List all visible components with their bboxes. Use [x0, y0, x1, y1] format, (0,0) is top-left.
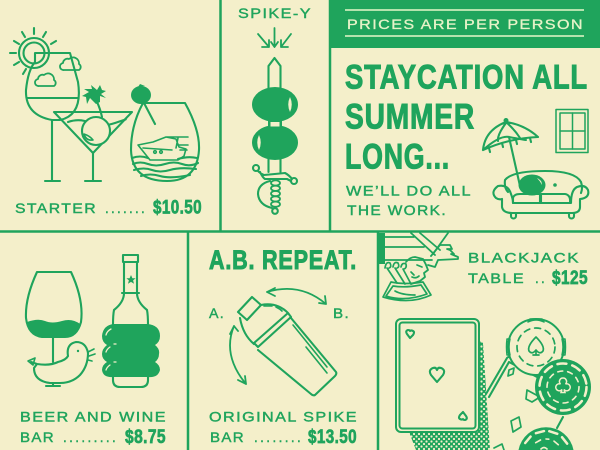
icon: cocktail umbrella — [483, 122, 538, 186]
icon: dotted card shadow — [409, 340, 490, 450]
price: blackjack table: .. — [535, 271, 546, 286]
icon: dark club chip — [535, 359, 591, 415]
price: original spike bar: $13.50 — [308, 427, 357, 448]
panel: blackjack — [378, 233, 591, 450]
icon: card pips — [494, 368, 540, 450]
icon: light spade chip — [506, 319, 566, 375]
heading: a.b. repeat: A.B. REPEAT. — [209, 245, 357, 275]
price: beer and wine bar: BEER AND WINE — [20, 410, 167, 424]
icon: wine glass with duck — [26, 272, 95, 386]
label: b: B. — [333, 306, 350, 321]
heading: staycation all summer long: LONG... — [345, 138, 450, 176]
panel: a.b. repeat — [209, 245, 358, 448]
icon: arrow b to a — [230, 326, 246, 384]
icon: arrow a to b — [267, 288, 326, 304]
price: blackjack table: TABLE — [468, 271, 525, 286]
price: starter — [15, 198, 202, 218]
icon: martini with palm island — [54, 85, 132, 181]
text: we'll do all the work: WE’LL DO ALL — [346, 184, 472, 198]
price: starter: STARTER — [15, 201, 97, 216]
price: original spike bar — [209, 410, 358, 448]
price: beer and wine bar: $8.75 — [125, 427, 166, 448]
banner: prices are per person: PRICES ARE PER PERSON — [347, 17, 584, 32]
icon: ace of hearts card — [396, 319, 479, 432]
icon: dealer at table — [378, 233, 458, 301]
icon: beer bottle — [102, 255, 160, 387]
price: starter: ....... — [105, 201, 146, 216]
price: blackjack table: BLACKJACK — [468, 250, 580, 266]
label: spike-y: SPIKE-Y — [238, 6, 312, 21]
price: blackjack table: $125 — [552, 268, 588, 289]
price: beer and wine bar: ......... — [63, 430, 117, 445]
panel: starter — [10, 28, 202, 218]
icon: tumbler with yacht and olive — [131, 84, 199, 181]
panel: spike-y — [238, 6, 312, 214]
price: original spike bar: ........ — [254, 430, 302, 445]
heading: staycation all summer long — [345, 58, 588, 176]
banner: prices are per person — [330, 0, 600, 48]
text: we'll do all the work: THE WORK. — [347, 203, 447, 218]
icon: window — [556, 110, 588, 152]
icon: three arrows — [258, 28, 291, 47]
icon: olive skewer sword — [252, 58, 298, 214]
icon: wine glass with sun and clouds — [10, 28, 81, 181]
price: original spike bar: BAR — [210, 430, 245, 445]
price: blackjack table — [468, 250, 588, 289]
price: original spike bar: ORIGINAL SPIKE — [209, 410, 358, 424]
price: beer and wine bar: BAR — [20, 430, 55, 445]
panel: staycation — [345, 58, 588, 218]
icon: back playing card — [486, 357, 540, 397]
icon: umbrella tip — [504, 118, 508, 123]
icon: cocktail shaker — [238, 297, 336, 395]
price: starter: $10.50 — [153, 198, 202, 218]
icon: sofa with olive — [493, 171, 588, 218]
heading: staycation all summer long: SUMMER — [345, 98, 475, 136]
price: beer and wine bar — [20, 410, 167, 448]
text: we'll do all the work — [346, 184, 472, 218]
label: a: A. — [209, 306, 225, 321]
panel: beer and wine — [20, 255, 167, 448]
icon: lower dark chip — [518, 417, 574, 450]
